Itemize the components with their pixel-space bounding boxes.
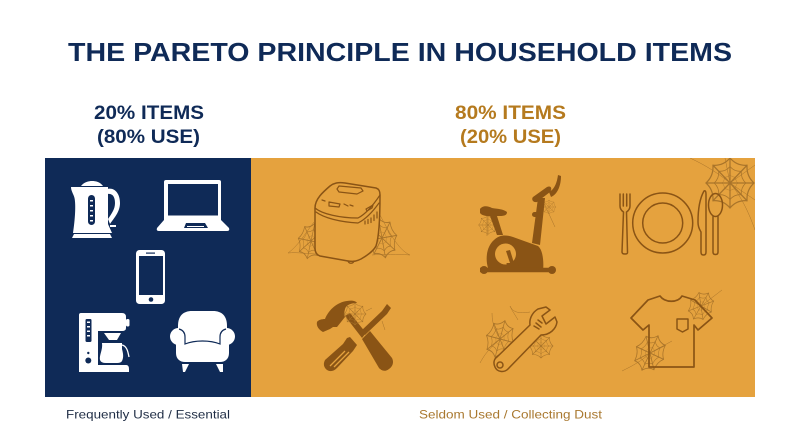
caption: seldom used: Seldom Used / Collecting Dust — [419, 408, 603, 422]
icon: smartphone — [136, 250, 165, 304]
panel background: navy — [45, 158, 251, 397]
panel background: orange — [251, 158, 755, 397]
title: THE PARETO PRINCIPLE IN HOUSEHOLD ITEMS — [68, 37, 732, 67]
icon: armchair — [170, 311, 235, 372]
icon: laptop — [157, 180, 229, 231]
panel: frequently used items — [45, 158, 251, 397]
icon: place setting — [620, 158, 755, 255]
heading: 80% items: (20% USE) — [460, 127, 561, 148]
caption: frequently used: Frequently Used / Essential — [66, 408, 230, 422]
heading: 20% items — [94, 103, 204, 148]
icon: wrench — [480, 306, 557, 371]
icon: t-shirt with pocket — [622, 287, 722, 377]
icon: hammer and screwdriver — [317, 301, 393, 371]
heading: 20% items: (80% USE) — [97, 127, 200, 148]
icon: coffee maker — [79, 313, 130, 372]
heading: 80% items: 80% ITEMS — [455, 103, 566, 124]
icon: kettle — [71, 181, 120, 238]
infographic — [45, 42, 755, 421]
icon: bread maker with cobwebs — [288, 183, 410, 263]
heading: 20% items: 20% ITEMS — [94, 103, 204, 124]
heading: 80% items — [455, 103, 566, 148]
icon: exercise bike — [478, 175, 561, 274]
panel: seldom used items — [251, 158, 755, 397]
